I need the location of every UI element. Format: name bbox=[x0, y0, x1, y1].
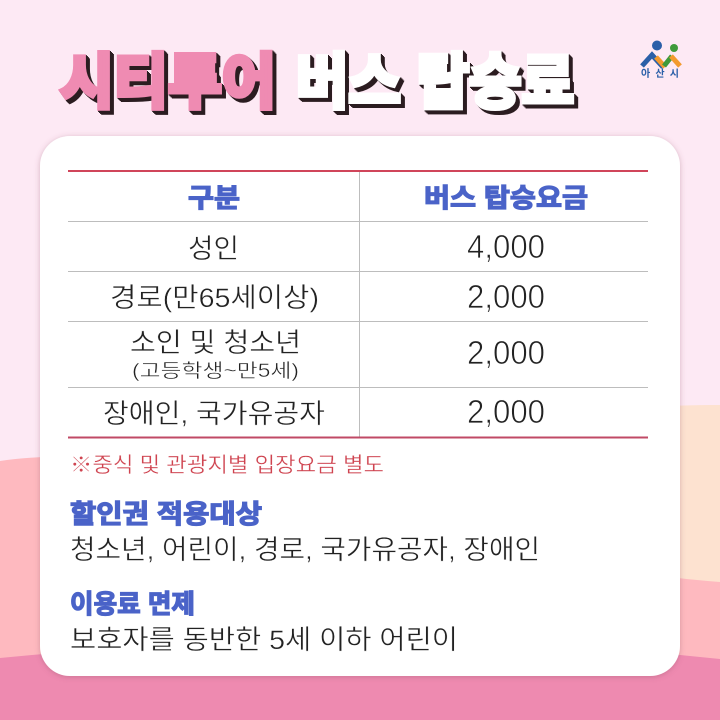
icon: Asan city logo bbox=[641, 40, 680, 80]
row: senior: 2,000 bbox=[467, 278, 545, 315]
panel: white card bbox=[40, 136, 680, 676]
title: white part: 버스 탑승료 bbox=[296, 49, 574, 116]
row: disabled and national merit: 장애인, 국가유공자 bbox=[103, 399, 325, 429]
row: senior: 경로(만65세이상) bbox=[110, 283, 319, 313]
fare table bbox=[68, 171, 648, 438]
text: exemption detail: 보호자를 동반한 5세 이하 어린이 bbox=[70, 625, 458, 655]
table header: category: 구분 bbox=[188, 183, 240, 213]
row: disabled and national merit: 2,000 bbox=[467, 393, 545, 430]
row: youth: (고등학생~만5세) bbox=[132, 360, 299, 382]
row: youth: 소인 및 청소년 bbox=[130, 328, 301, 358]
row: youth bbox=[130, 328, 545, 382]
title: pink part: 시티투어 bbox=[60, 49, 276, 116]
row: youth: 2,000 bbox=[467, 334, 545, 371]
row: senior bbox=[110, 278, 545, 315]
heading: discount targets: 할인권 적용대상 bbox=[70, 499, 262, 529]
icon: Asan city logo: 아 산 시 bbox=[641, 67, 679, 80]
row: adult: 성인 bbox=[188, 234, 239, 264]
note: ※중식 및 관광지별 입장요금 별도 bbox=[70, 454, 384, 477]
text: discount target list: 청소년, 어린이, 경로, 국가유공자, 장애인 bbox=[70, 535, 540, 565]
table header: bus fare: 버스 탑승요금 bbox=[424, 183, 588, 213]
row: adult: 4,000 bbox=[467, 228, 545, 265]
row: disabled and national merit bbox=[103, 393, 545, 430]
row: adult bbox=[188, 228, 545, 265]
heading: fee exemption: 이용료 면제 bbox=[70, 589, 195, 619]
title bbox=[60, 49, 574, 116]
